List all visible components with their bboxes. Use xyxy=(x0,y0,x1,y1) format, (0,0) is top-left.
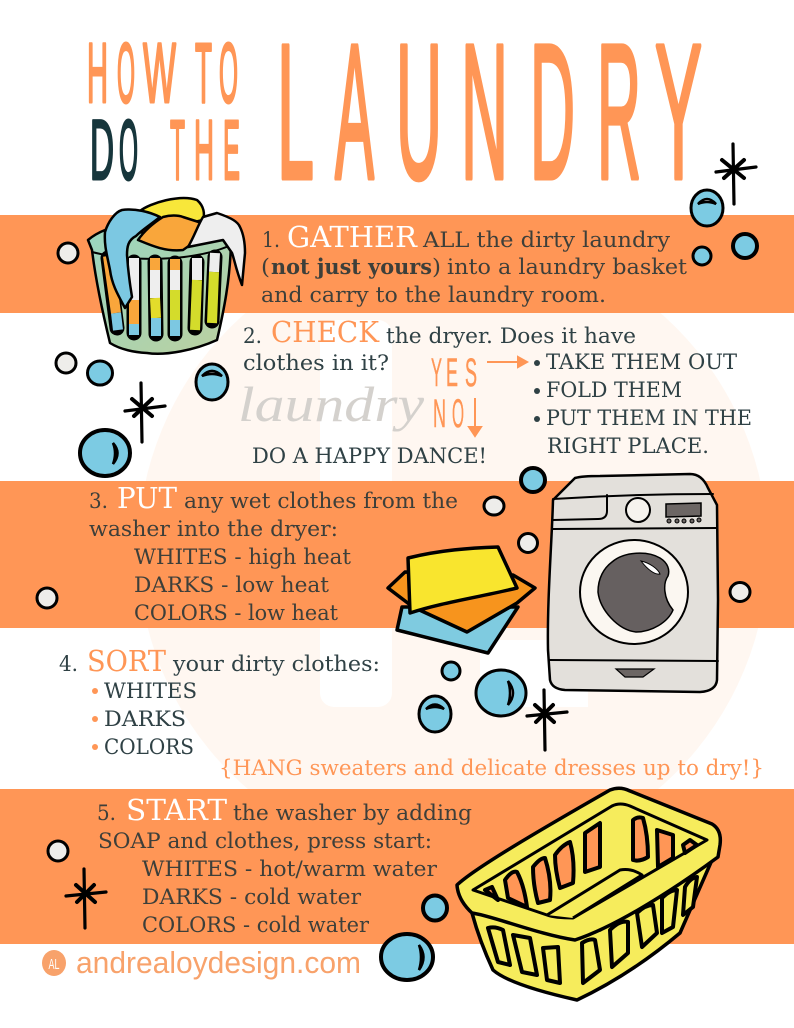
step 2 text: clothes in it? xyxy=(243,351,389,375)
step 2 text xyxy=(243,315,636,375)
step 5 text: 5. xyxy=(97,801,116,825)
step 2 text: the dryer. Does it have xyxy=(386,324,636,348)
step 3 text: 3. xyxy=(89,489,108,513)
title: how to do the: O xyxy=(119,103,138,197)
icon: folded clothes xyxy=(388,547,535,653)
arrow: no xyxy=(469,398,481,436)
step 5 text: START xyxy=(126,793,228,827)
yes list: TAKE THEM OUT xyxy=(546,350,737,374)
yes list: PUT THEM IN THE xyxy=(546,406,752,430)
step 4 text: WHITES xyxy=(104,679,197,703)
no result: DO A HAPPY DANCE! xyxy=(252,444,487,468)
white bubbles xyxy=(37,243,750,861)
title: laundry: N xyxy=(461,4,508,219)
text: O xyxy=(452,392,464,436)
text: E xyxy=(223,103,240,197)
step 5 text: COLORS - cold water xyxy=(142,913,370,937)
step 4 text: DARKS xyxy=(104,707,186,731)
script word: laundry: laundry xyxy=(238,376,425,432)
step 5 text: DARKS - cold water xyxy=(142,885,362,909)
text: S xyxy=(465,351,477,395)
step 1 text: ( xyxy=(261,255,270,279)
step 1 text xyxy=(261,220,688,307)
note: hang sweaters: {HANG sweaters and delicate dresses up to dry!} xyxy=(219,756,764,780)
step 3 text: DARKS - low heat xyxy=(134,573,330,597)
title: how to do the: T xyxy=(195,26,212,120)
step 5 text xyxy=(97,793,472,937)
title: laundry: L xyxy=(277,4,314,219)
footer url: andrealoydesign.com xyxy=(76,945,361,980)
washer door xyxy=(580,540,688,644)
icon: yellow laundry basket xyxy=(457,788,720,1000)
title: how to do the: O xyxy=(117,26,135,120)
step 3 text: COLORS - low heat xyxy=(134,601,339,625)
text: Y xyxy=(655,4,702,219)
step 4 text: 4. xyxy=(59,652,78,676)
step 3 text: PUT xyxy=(117,481,178,515)
title: how to do the: D xyxy=(90,103,114,197)
step 5 text: SOAP and clothes, press start: xyxy=(98,829,432,853)
washer tray xyxy=(616,669,654,677)
step 3 text: WHITES - high heat xyxy=(134,545,352,569)
step 4 text xyxy=(59,644,380,759)
step 1 text: GATHER xyxy=(287,220,418,254)
sparkle 4 xyxy=(66,869,106,928)
step 4 text: COLORS xyxy=(104,735,194,759)
step 1 text: into a laundry basket xyxy=(447,255,688,279)
yes label: E xyxy=(446,351,458,395)
title: how to do the: H xyxy=(194,103,214,197)
orange band 2 xyxy=(0,481,794,628)
sparkle 1 xyxy=(716,144,756,204)
orange band 3 xyxy=(0,789,794,944)
title: how to do the xyxy=(87,26,240,197)
title: how to do the: W xyxy=(143,26,176,120)
washer dial xyxy=(626,498,650,522)
title: laundry: A xyxy=(335,4,374,219)
text: O xyxy=(219,26,238,120)
footer logo xyxy=(42,950,66,976)
yes label xyxy=(431,351,477,395)
yes label: Y xyxy=(431,351,442,395)
step 3 text xyxy=(89,481,458,625)
yes list xyxy=(534,350,752,458)
step 1 text: ) xyxy=(432,255,441,279)
step 4 text: SORT xyxy=(87,644,167,678)
no label: N xyxy=(433,392,446,436)
sparkle 2 xyxy=(125,383,165,442)
sparkle 3 xyxy=(527,690,567,750)
title: laundry xyxy=(277,4,702,219)
washer display xyxy=(666,503,701,517)
step 1 text: and carry to the laundry room. xyxy=(261,283,606,307)
step 5 text: WHITES - hot/warm water xyxy=(142,857,438,881)
step 3 text: washer into the dryer: xyxy=(89,517,338,541)
title: laundry: U xyxy=(396,4,442,219)
watermark: AL logo xyxy=(138,235,768,865)
step 1 text: not just yours xyxy=(271,254,432,279)
title: laundry: R xyxy=(597,4,641,219)
icon: laundry basket with clothes xyxy=(88,198,245,354)
yes list: FOLD THEM xyxy=(546,378,682,402)
blue bubbles xyxy=(80,190,757,980)
step 3 text: any wet clothes from the xyxy=(184,489,458,513)
step 1 text: 1. xyxy=(262,228,280,252)
orange band 1 xyxy=(0,215,794,313)
step 1 text: ALL the dirty laundry xyxy=(422,228,670,252)
icon: washing machine xyxy=(548,474,718,692)
yes list: RIGHT PLACE. xyxy=(547,434,709,458)
title: how to do the: T xyxy=(170,103,185,197)
step 2 text: 2. xyxy=(243,324,262,348)
step 4 text: your dirty clothes: xyxy=(172,652,380,676)
title: how to do the: H xyxy=(87,26,108,120)
arrow: yes xyxy=(487,357,527,367)
title: laundry: D xyxy=(530,4,575,219)
footer logo: AL xyxy=(48,956,60,973)
step 5 text: the washer by adding xyxy=(233,801,472,825)
step 2 text: CHECK xyxy=(271,315,380,349)
